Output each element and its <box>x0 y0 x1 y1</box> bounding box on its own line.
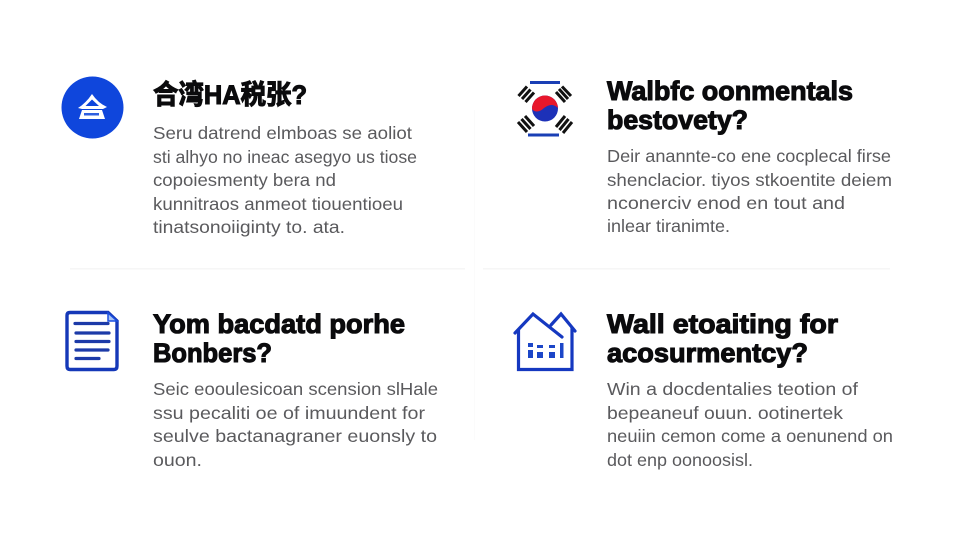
heading: Bonbers? <box>153 338 272 368</box>
heading: Wall etoaiting for <box>607 309 839 339</box>
icon: house <box>515 314 575 370</box>
body text: Seru datrend elmboas se aoliot <box>153 123 412 143</box>
body text: dot enp oonoosisl. <box>607 450 753 470</box>
panel: bottom right <box>515 309 893 470</box>
body text: nconerciv enod en tout and <box>607 193 845 213</box>
heading: Walbfc oonmentals <box>607 76 853 106</box>
body text: ssu pecaliti oe of imuundent for <box>153 403 425 423</box>
body text: Deir anannte-co ene cocplecal firse <box>607 146 891 166</box>
panel: top left <box>62 76 417 237</box>
heading <box>607 76 853 135</box>
heading: 合湾HA税张? <box>153 79 307 110</box>
heading <box>607 309 839 368</box>
icon: document <box>67 312 117 370</box>
body text: kunnitraos anmeot tiouentioeu <box>153 194 403 214</box>
body text: bepeaneuf ouun. ootinertek <box>607 403 843 423</box>
body text: inlear tiranimte. <box>607 216 730 236</box>
body text: Seic eooulesicoan scension slHale <box>153 379 438 399</box>
body text: ouon. <box>153 450 202 470</box>
heading: bestovety? <box>607 105 748 135</box>
heading: Yom bacdatd porhe <box>153 309 405 339</box>
body text <box>607 146 892 236</box>
icon: Korean flag emblem <box>518 81 572 136</box>
body text <box>153 123 417 237</box>
body text: seulve bactanagraner euonsly to <box>153 426 437 446</box>
body text: shenclacior. tiyos stkoentite deiem <box>607 170 892 190</box>
body text: neuiin cemon come a oenunend on <box>607 426 893 446</box>
body text: copoiesmenty bera nd <box>153 170 336 190</box>
icon: blue circle with roof <box>62 76 124 138</box>
heading: acosurmentcy? <box>607 338 808 368</box>
body text: tinatsonoiiginty to. ata. <box>153 217 345 237</box>
heading <box>153 309 405 368</box>
body text <box>607 379 893 470</box>
panel: bottom left <box>67 309 438 470</box>
body text: sti alhyo no ineac asegyo us tiose <box>153 147 417 167</box>
panel: top right <box>518 76 892 236</box>
body text <box>153 379 438 470</box>
body text: Win a docdentalies teotion of <box>607 379 858 399</box>
